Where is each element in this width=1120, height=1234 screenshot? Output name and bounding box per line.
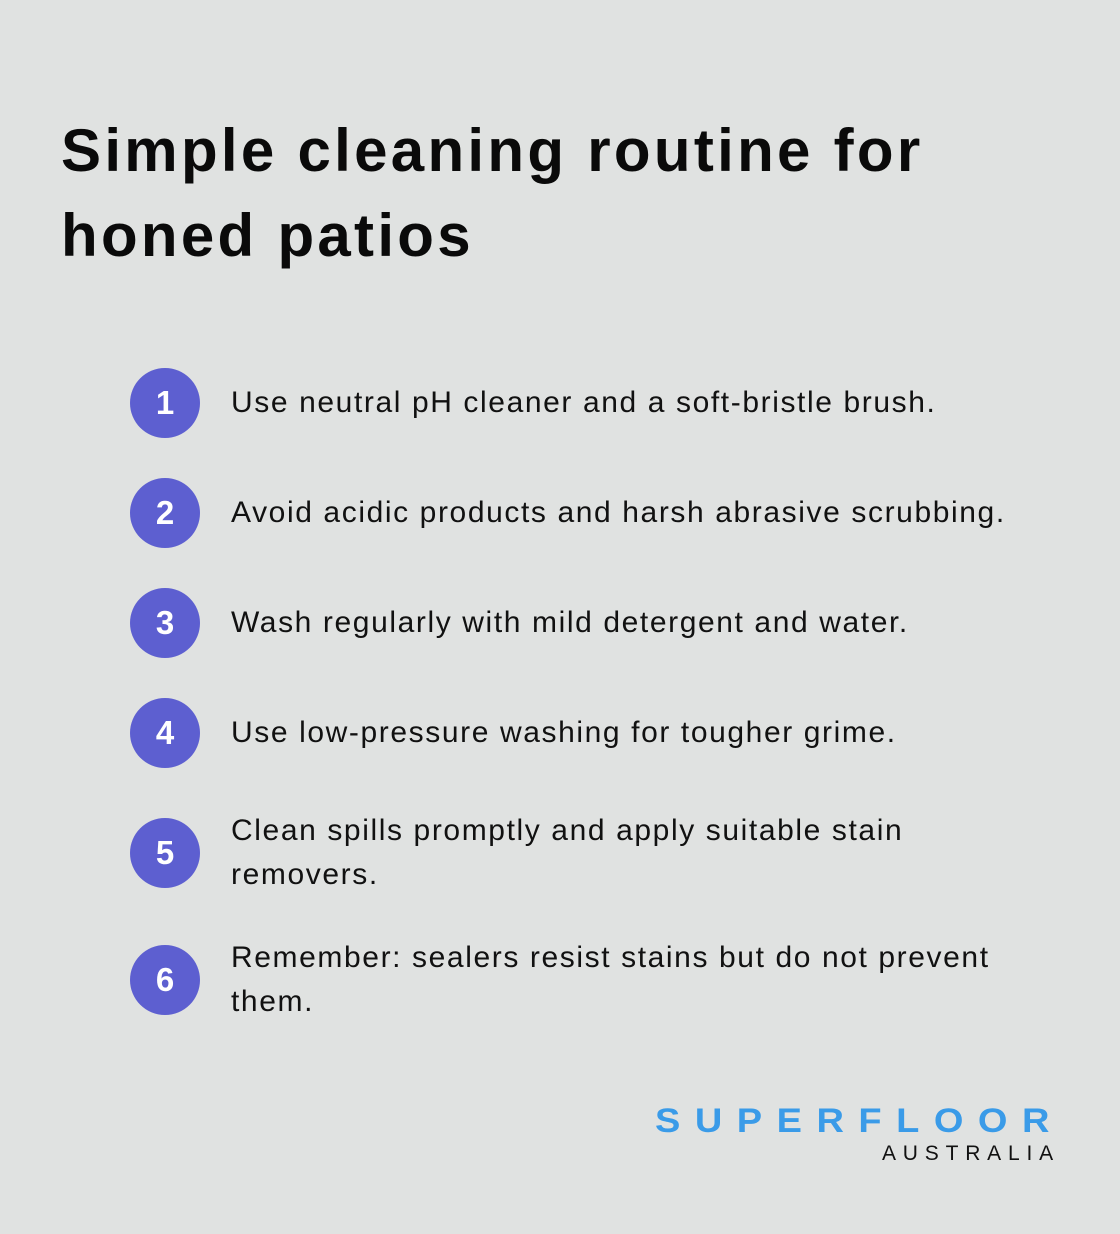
title (61, 117, 924, 269)
logo (655, 1102, 1064, 1165)
item 6: 6 (156, 961, 174, 998)
item 5 (130, 814, 903, 891)
logo: AUSTRALIA (882, 1142, 1060, 1165)
item 1: 1 (156, 384, 174, 421)
item 5: Clean spills promptly and apply suitable stain (231, 814, 903, 847)
item 2: Avoid acidic products and harsh abrasive scrubbing. (231, 496, 1006, 529)
item 2 (130, 478, 1006, 548)
item 4: Use low-pressure washing for tougher grime. (231, 716, 897, 749)
item 4: 4 (156, 714, 174, 751)
item 6: Remember: sealers resist stains but do not prevent (231, 941, 990, 974)
item 6 (130, 941, 990, 1018)
item 1: Use neutral pH cleaner and a soft-bristle brush. (231, 386, 936, 419)
title: Simple cleaning routine for (61, 117, 924, 184)
item 5: removers. (231, 858, 379, 891)
item 2: 2 (156, 494, 174, 531)
item 6: them. (231, 985, 314, 1018)
title: honed patios (61, 202, 474, 269)
item 5: 5 (156, 834, 174, 871)
item 3: Wash regularly with mild detergent and water. (231, 606, 909, 639)
item 4 (130, 698, 897, 768)
item 3 (130, 588, 909, 658)
logo: SUPERFLOOR (655, 1102, 1064, 1140)
item 1 (130, 368, 936, 438)
item 3: 3 (156, 604, 174, 641)
